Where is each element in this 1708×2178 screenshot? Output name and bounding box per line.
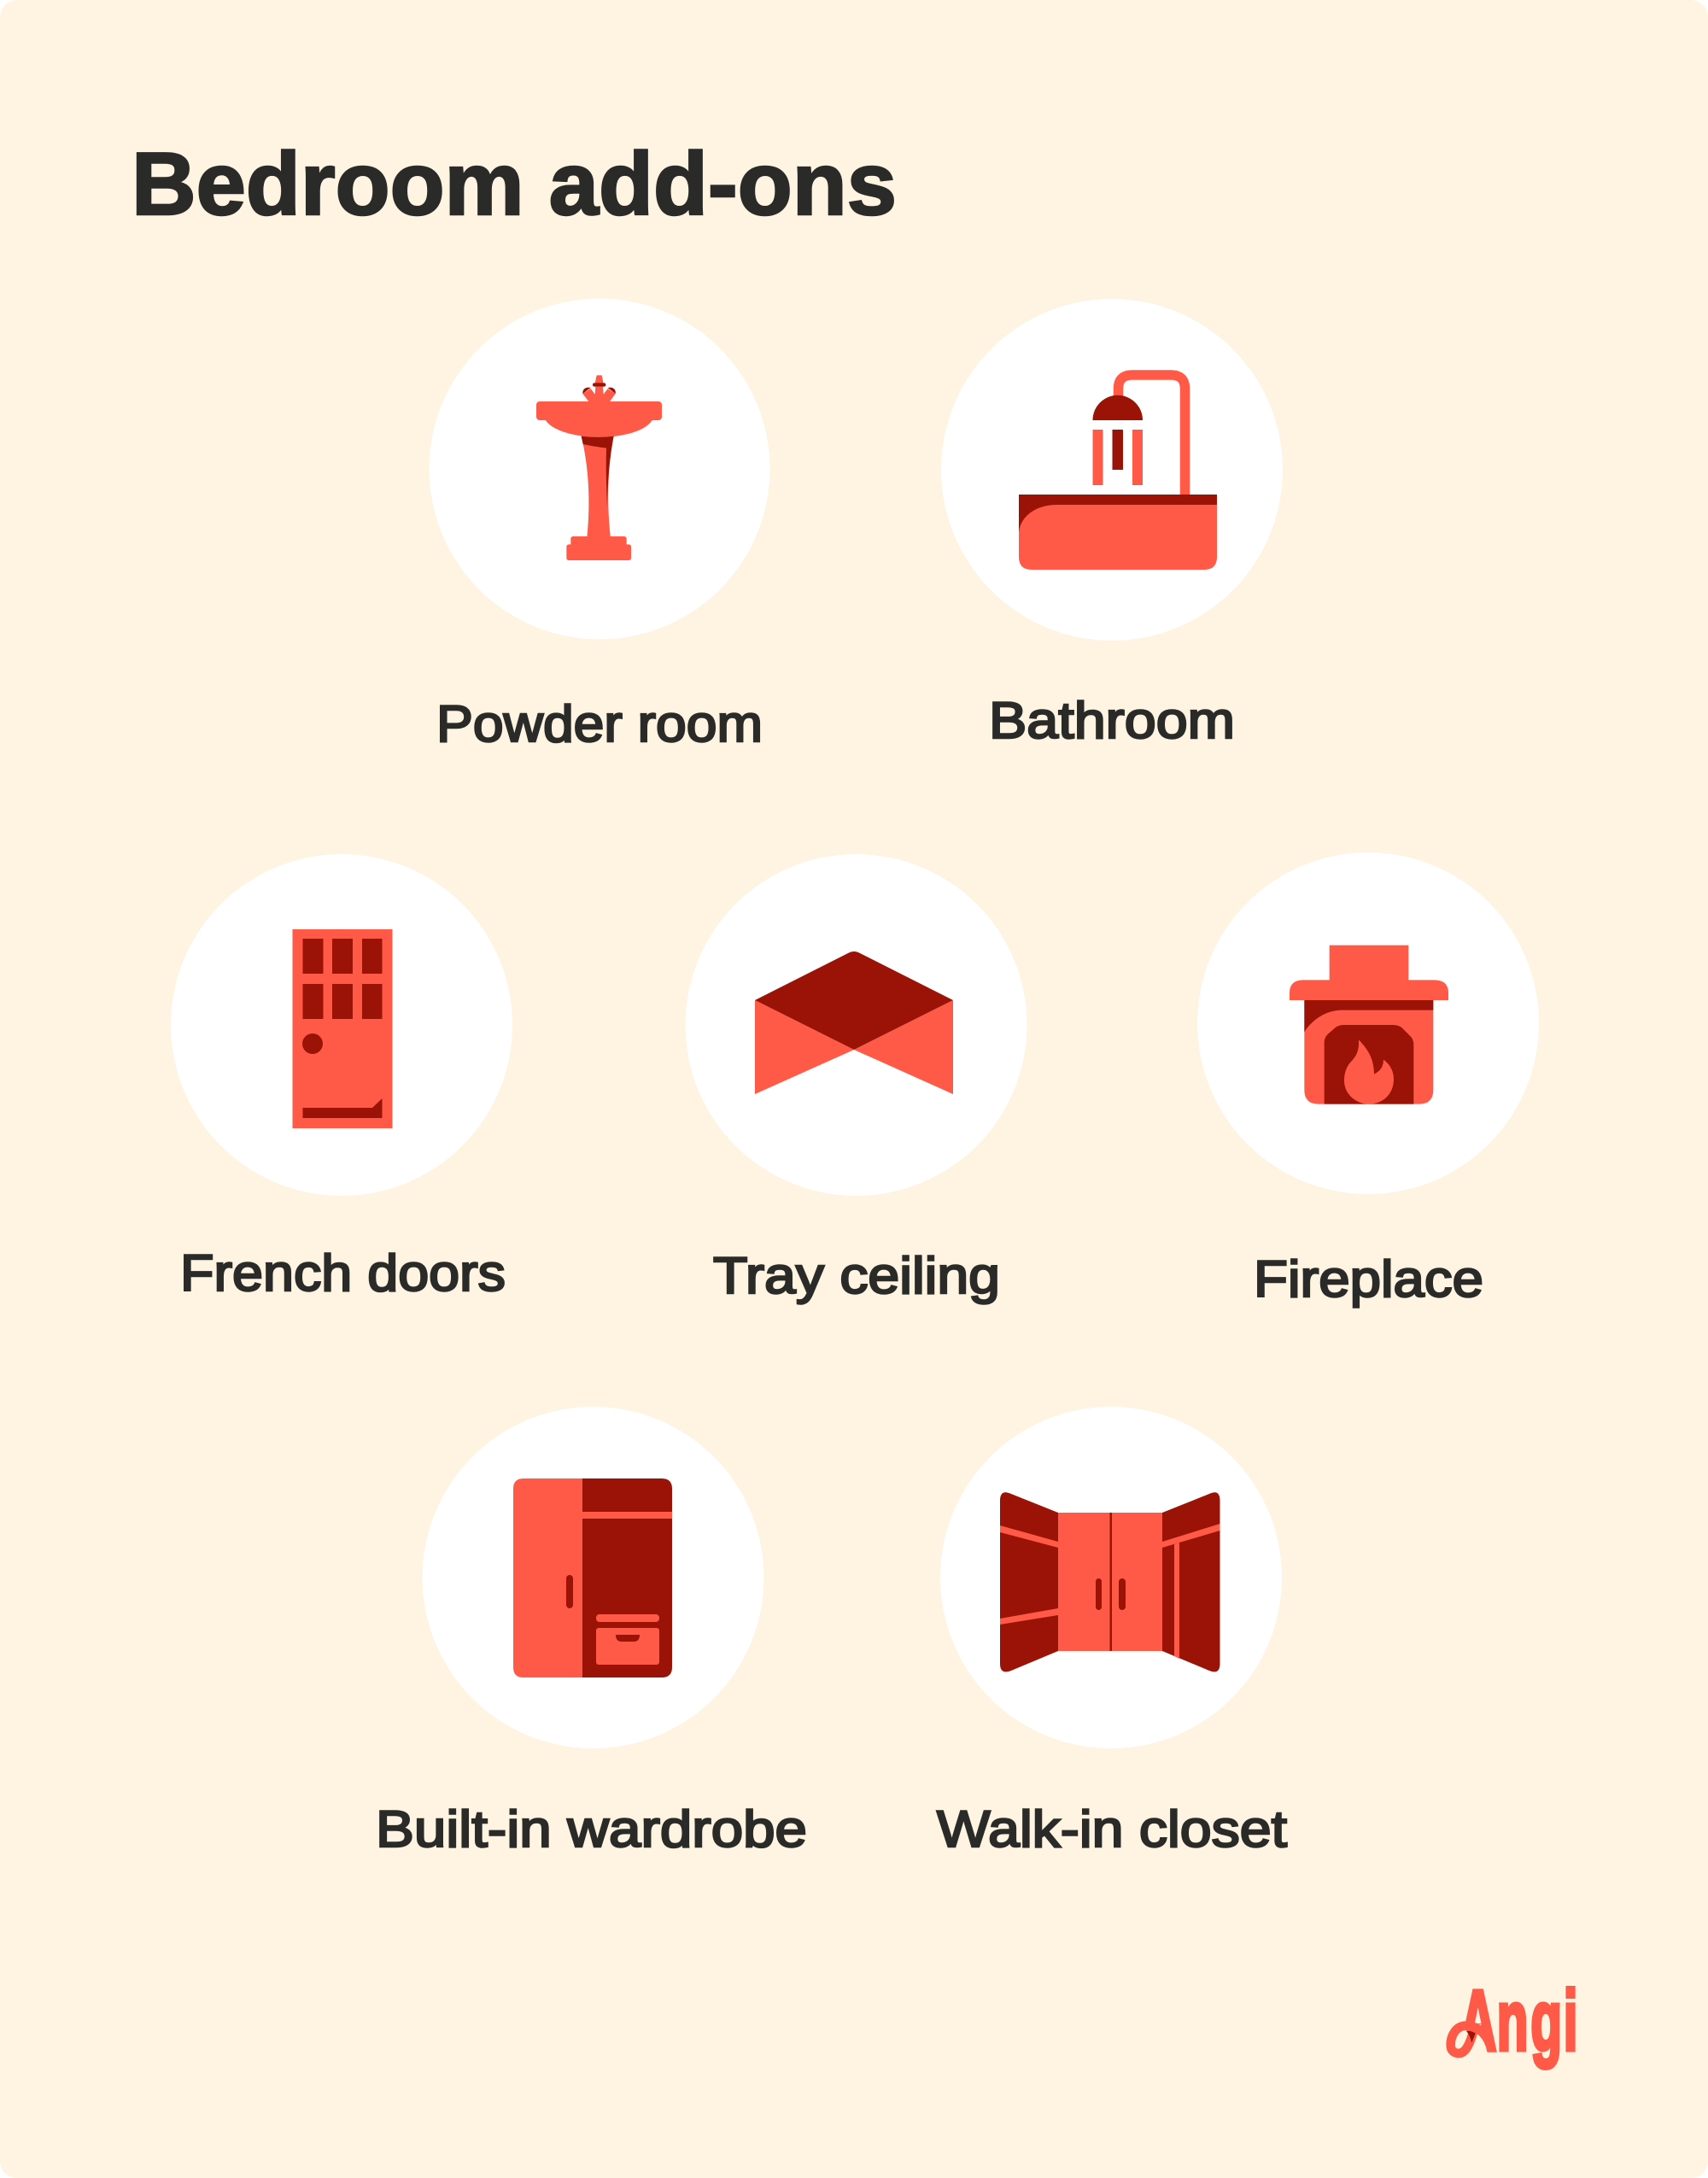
icon background circle — [422, 1407, 763, 1748]
panel: tray ceiling — [685, 854, 1027, 1304]
icon: door — [292, 929, 393, 1128]
icon background circle — [171, 854, 512, 1196]
logo: Angi: Angi — [1459, 1973, 1577, 2069]
label: bathroom: Bathroom — [989, 692, 1235, 749]
label: walk-in closet: Walk-in closet — [937, 1800, 1287, 1858]
icon background circle — [940, 1407, 1282, 1748]
panel: walk-in closet — [937, 1407, 1287, 1858]
icon background circle — [1197, 852, 1539, 1194]
icon background circle — [685, 854, 1027, 1196]
label: built-in wardrobe: Built-in wardrobe — [376, 1800, 807, 1858]
icon: pedestal sink — [536, 375, 662, 560]
icon: fireplace — [1290, 946, 1448, 1104]
panel: fireplace — [1197, 852, 1539, 1308]
panel: french doors — [171, 854, 512, 1302]
panel: powder room — [429, 299, 770, 752]
panel: bathroom — [941, 299, 1283, 749]
panel: built-in wardrobe — [376, 1407, 807, 1858]
icon background circle — [941, 299, 1283, 641]
icon: bathtub with shower — [1019, 375, 1217, 570]
label: tray ceiling: Tray ceiling — [713, 1247, 1000, 1304]
title: Bedroom add-ons — [132, 135, 897, 234]
icon: walk-in closet — [1000, 1492, 1220, 1672]
icon: tray ceiling — [755, 951, 953, 1094]
label: powder room: Powder room — [436, 695, 763, 752]
label: french doors: French doors — [180, 1244, 506, 1302]
icon: wardrobe — [513, 1478, 672, 1677]
label: fireplace: Fireplace — [1254, 1250, 1483, 1308]
icon background circle — [429, 299, 770, 639]
